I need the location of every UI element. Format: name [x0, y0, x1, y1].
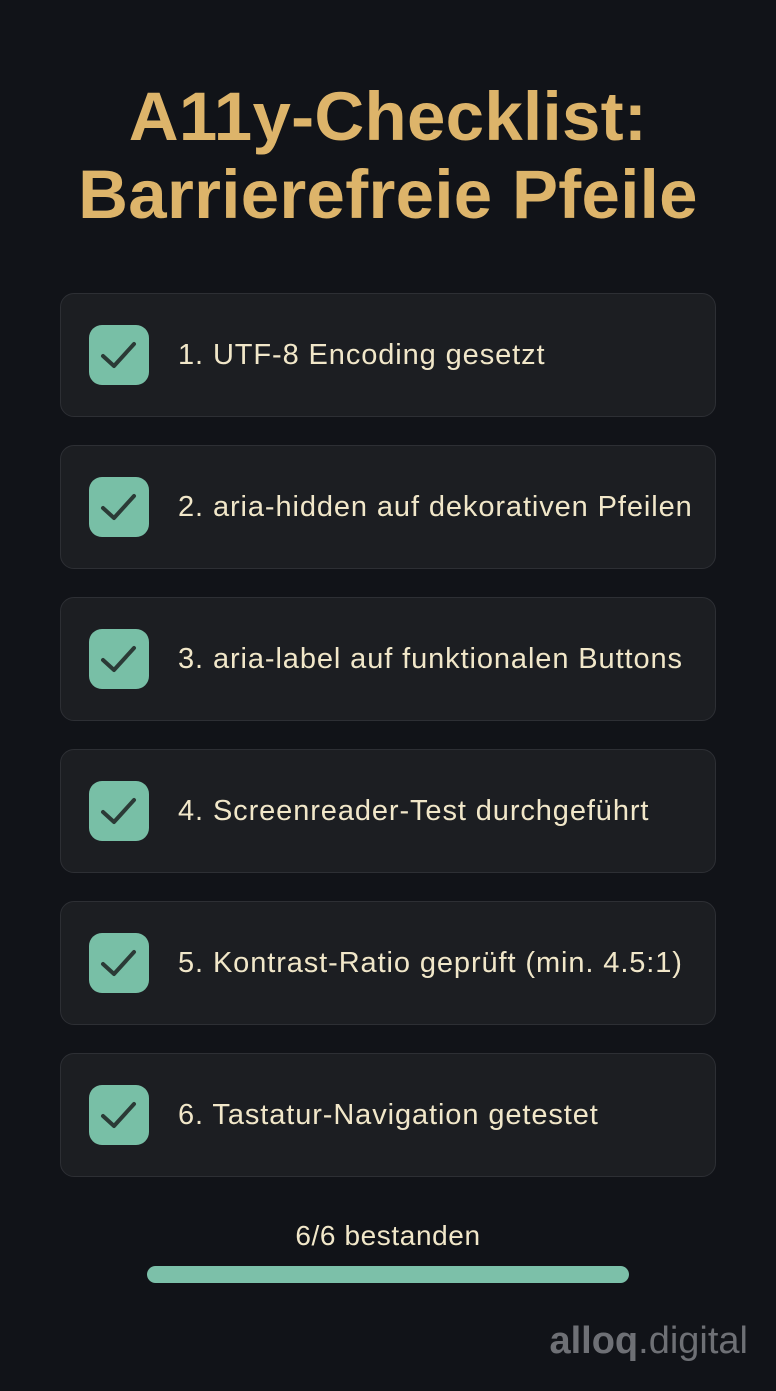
card 2: [60, 445, 716, 569]
card 1: [60, 293, 716, 417]
title: [78, 78, 698, 233]
title: A11y-Checklist:: [129, 78, 647, 155]
checkbox: [89, 477, 149, 537]
checkbox: [89, 1085, 149, 1145]
text: 3. aria-label auf funktionalen Buttons: [178, 643, 683, 675]
text: 1. UTF-8 Encoding gesetzt: [178, 339, 545, 371]
title: Barrierefreie Pfeile: [78, 156, 698, 233]
checkbox: [89, 781, 149, 841]
card 3: [60, 597, 716, 721]
text: 4. Screenreader-Test durchgeführt: [178, 795, 649, 827]
text: 5. Kontrast-Ratio geprüft (min. 4.5:1): [178, 947, 683, 979]
text: 6. Tastatur-Navigation getestet: [178, 1099, 599, 1131]
checkbox: [89, 629, 149, 689]
checkbox: [89, 933, 149, 993]
progress label: 6/6 bestanden: [295, 1220, 481, 1251]
text: 2. aria-hidden auf dekorativen Pfeilen: [178, 491, 693, 523]
card 6: [60, 1053, 716, 1177]
card 5: [60, 901, 716, 1025]
card 4: [60, 749, 716, 873]
checkbox: [89, 325, 149, 385]
progress bar: [147, 1266, 629, 1283]
logo: alloq.digital: [549, 1320, 748, 1362]
